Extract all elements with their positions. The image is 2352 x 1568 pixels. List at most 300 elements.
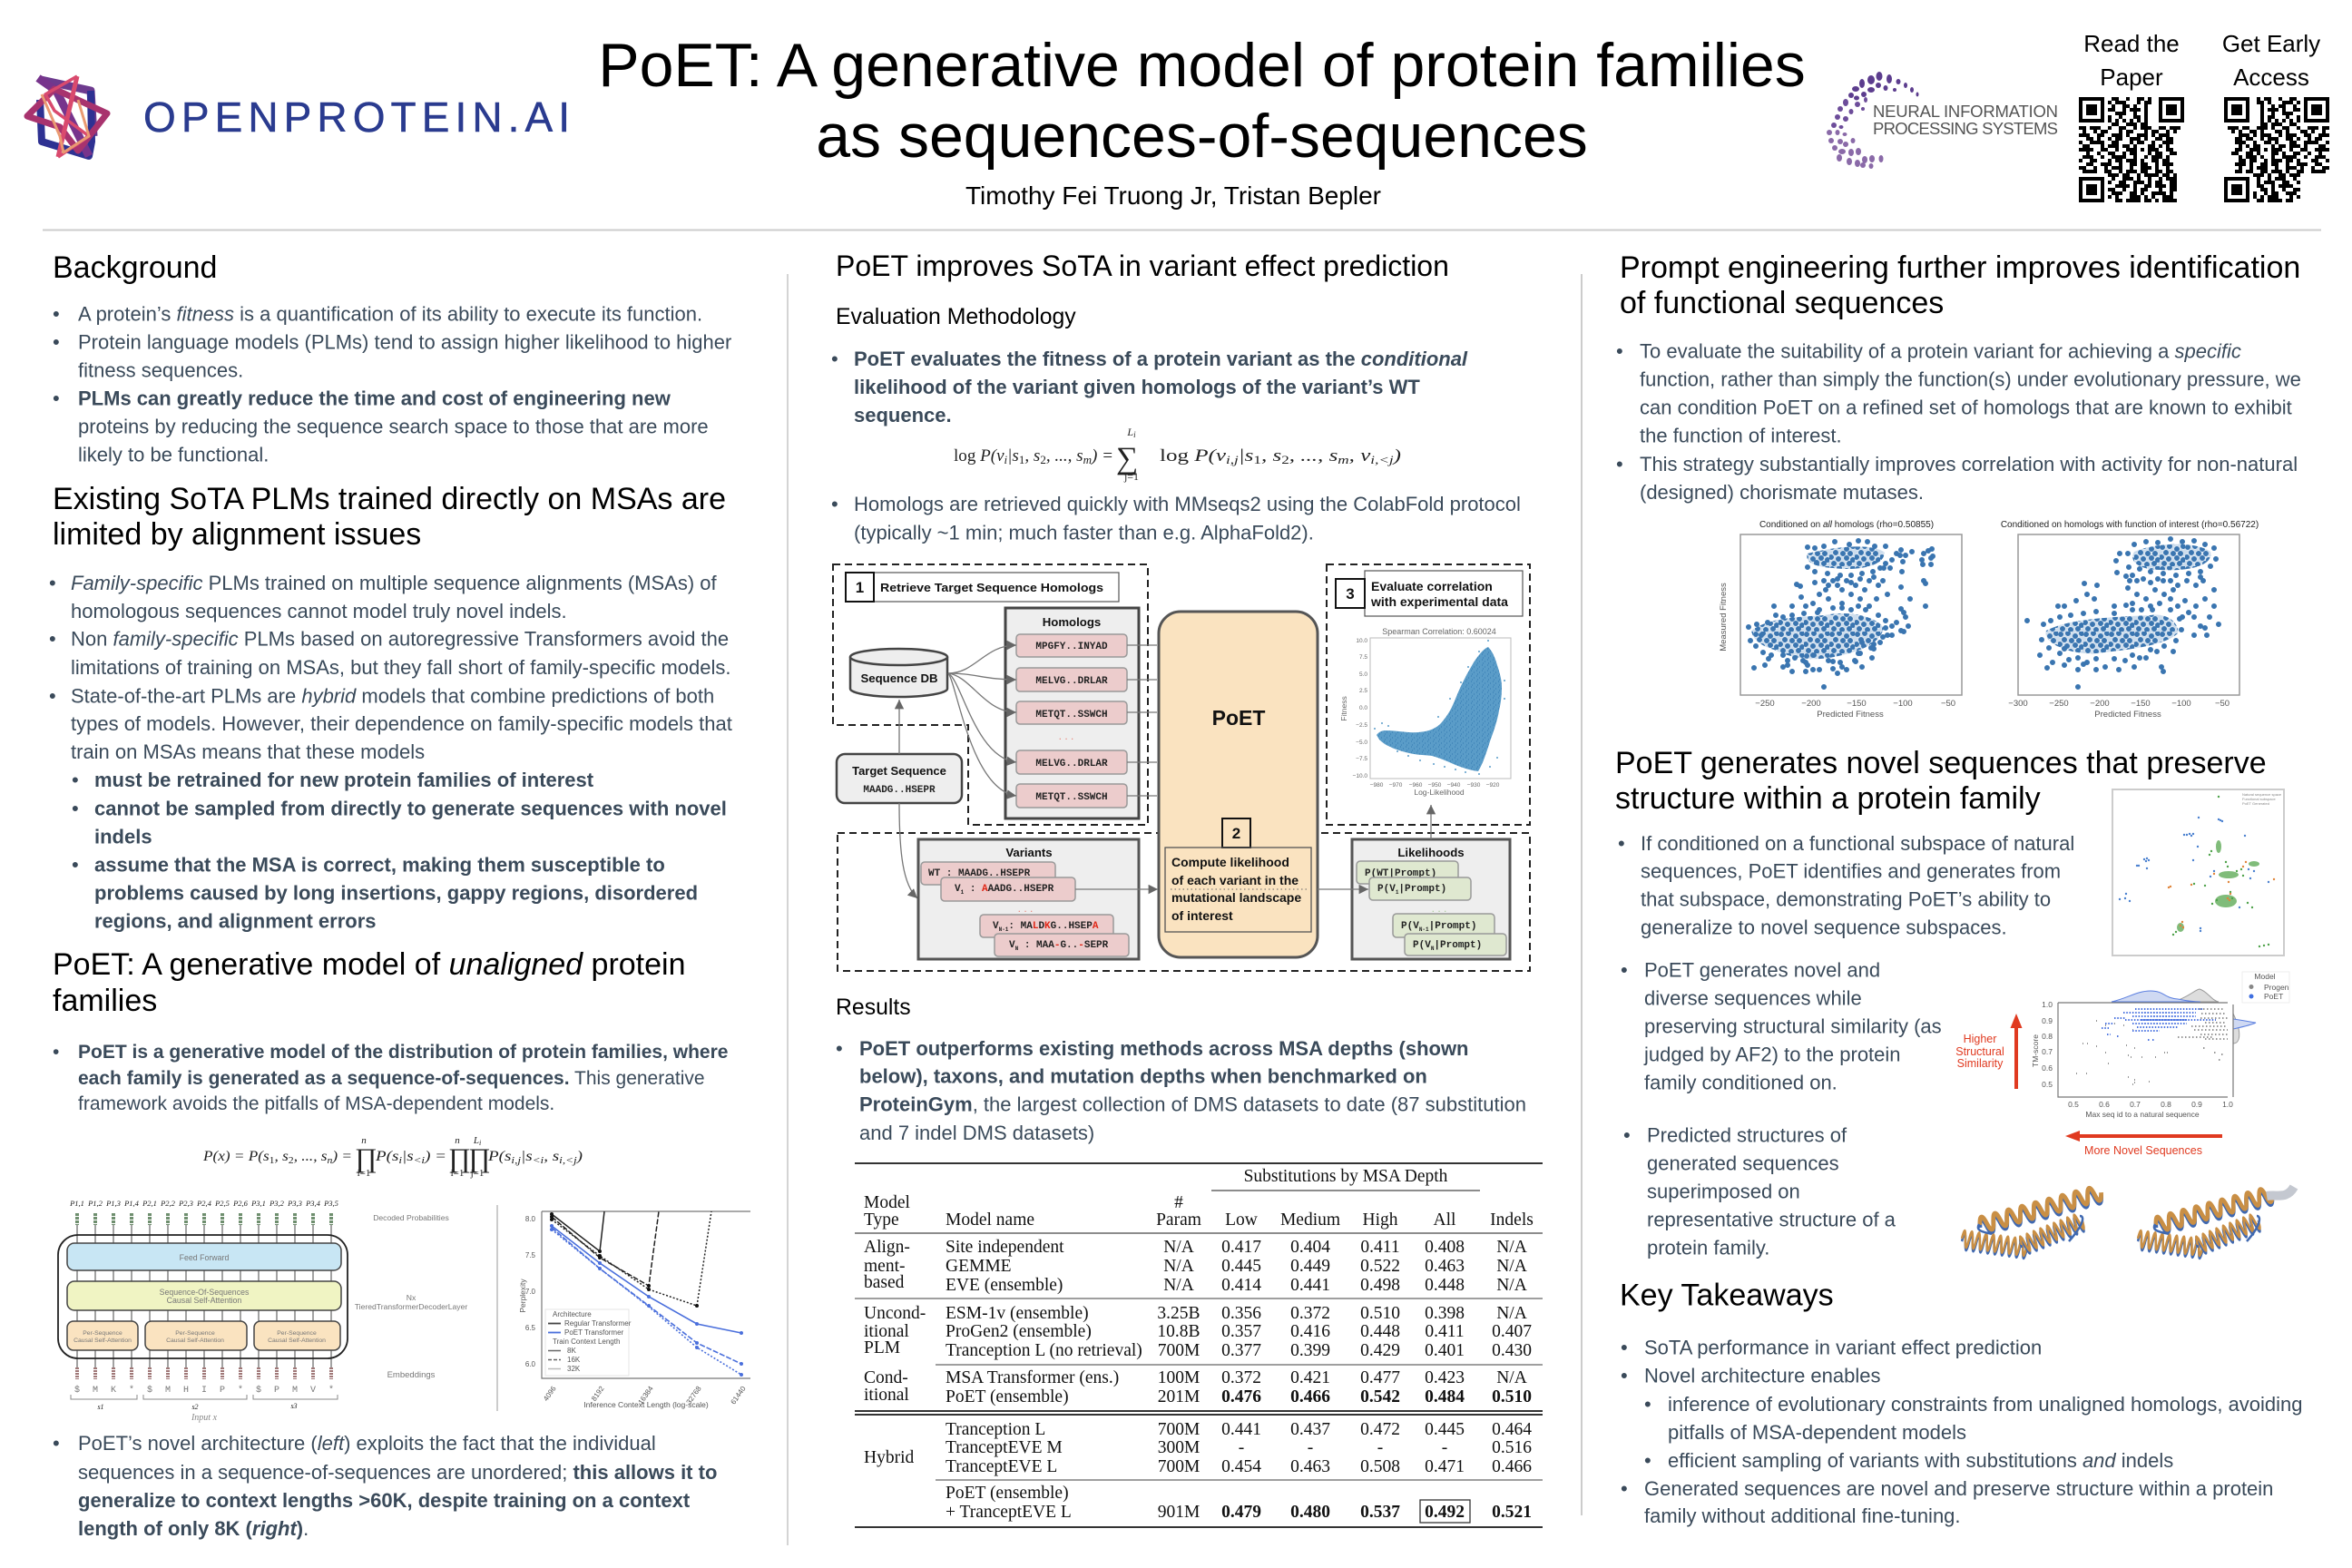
callout: higher structural similarity bbox=[1955, 1014, 2022, 1089]
score column: all: 0.445 bbox=[1425, 1420, 1465, 1439]
heading: background: Background bbox=[53, 250, 217, 285]
blue PoET points bbox=[2102, 1009, 2216, 1040]
text block: key takeaways: SoTA performance in variant effect prediction bbox=[1644, 1336, 2042, 1359]
panel: middle column bbox=[831, 250, 1543, 1527]
scattered points bbox=[2027, 539, 2219, 687]
tick labels: 0.7 bbox=[2042, 1047, 2053, 1056]
axis labels: Measured Fitness bbox=[1719, 583, 1729, 652]
input tokens: P bbox=[220, 1386, 225, 1396]
chart: all homologs scatter: Conditioned on all homologs (rho=0.50855) bbox=[1759, 520, 1934, 530]
table: benchmark results bbox=[855, 1163, 1543, 1527]
x tick labels: 16384 bbox=[637, 1385, 655, 1406]
text block: key takeaways: Generated sequences are novel and preserve structure within a protein bbox=[1644, 1477, 2273, 1500]
target sequence box bbox=[837, 754, 962, 803]
equation: sequence-of-sequences factorization: ∏ bbox=[468, 1143, 491, 1173]
step 1 header: Retrieve Target Sequence Homologs bbox=[880, 581, 1103, 594]
text block: background: proteins by reducing the sequence search space to those that are more bbox=[78, 416, 709, 437]
per-sequence attention blocks: Per-Sequence bbox=[175, 1330, 215, 1337]
homologs panel: Homologs bbox=[1043, 615, 1101, 629]
per-sequence attention blocks: Per-Sequence bbox=[83, 1330, 122, 1337]
probability labels: P3,1 bbox=[250, 1199, 266, 1208]
params column: N/A bbox=[1163, 1257, 1194, 1276]
PoET model box bbox=[1159, 612, 1318, 957]
callout: higher structural similarity: Structural bbox=[1955, 1045, 2004, 1058]
likelihoods panel bbox=[1352, 839, 1510, 959]
equation: sequence-of-sequences factorization: i bbox=[479, 1139, 481, 1147]
score column: all: 0.484 bbox=[1425, 1387, 1465, 1406]
likelihoods panel: P(V bbox=[1413, 940, 1431, 951]
logo wordmark: OPENPROTEIN.AI bbox=[143, 93, 570, 141]
text block: background: fitness sequences. bbox=[78, 359, 243, 381]
score column: medium: 0.441 bbox=[1290, 1276, 1330, 1295]
text block: prompt engineering: • bbox=[1616, 453, 1623, 475]
score column: low: 0.357 bbox=[1221, 1322, 1261, 1341]
heading: key takeaways: Key Takeaways bbox=[1620, 1278, 1834, 1312]
model names: Site independent bbox=[946, 1238, 1064, 1257]
score column: medium: 0.480 bbox=[1290, 1503, 1330, 1522]
y tick labels bbox=[525, 1215, 536, 1368]
legend bbox=[545, 1309, 632, 1376]
heading: prompt engineering: Prompt engineering further improves identification bbox=[1620, 250, 2300, 285]
legend: 16K bbox=[567, 1356, 581, 1364]
x tick labels: 4096 bbox=[542, 1385, 558, 1403]
text block: diversity: preserving structural similarity (as bbox=[1644, 1014, 1942, 1038]
text block: methodology: likelihood of the variant given homologs of the variant’s WT bbox=[854, 376, 1420, 398]
axis labels: −150 bbox=[2131, 699, 2151, 709]
text block: diversity: family conditioned on. bbox=[1644, 1071, 1838, 1094]
chart: homologs with function scatter bbox=[2001, 520, 2259, 720]
axis tick labels: −10.0 bbox=[1353, 773, 1367, 779]
probability labels: P2,2 bbox=[160, 1199, 176, 1208]
tick labels: 0.8 bbox=[2161, 1100, 2171, 1109]
text block: existing PLMs: limitations of training on MSAs, but they fall short of family-specific models. bbox=[71, 656, 731, 679]
model names bbox=[946, 1238, 1142, 1522]
text block: homolog retrieval: • bbox=[831, 493, 838, 515]
callout: more novel sequences: More Novel Sequences bbox=[2084, 1144, 2202, 1157]
outer decoder block bbox=[58, 1235, 348, 1358]
score column: low: 0.417 bbox=[1221, 1238, 1261, 1257]
y tick labels: 7.5 bbox=[525, 1251, 536, 1259]
heading: variant effect prediction: PoET improves SoTA in variant effect prediction bbox=[836, 250, 1449, 282]
input tokens: H bbox=[183, 1386, 189, 1396]
text block: diversity: • bbox=[1621, 958, 1628, 982]
chart markers bbox=[552, 1214, 697, 1306]
heading: prompt engineering bbox=[1620, 250, 2300, 320]
x tick labels: 8192 bbox=[590, 1385, 606, 1403]
sequence-of-sequences attention block bbox=[67, 1281, 341, 1310]
text block: existing PLMs: • bbox=[49, 628, 56, 650]
equation: conditional likelihood: m bbox=[1083, 453, 1092, 466]
heading: PoET generative model bbox=[53, 947, 686, 1018]
text block: existing PLMs: homologous sequences cannot model truly novel indels. bbox=[71, 600, 567, 622]
equation: sequence-of-sequences factorization: P(s bbox=[376, 1149, 395, 1164]
input tokens: * bbox=[328, 1385, 334, 1396]
variants panel: 1 bbox=[961, 889, 965, 896]
legend bbox=[2242, 972, 2289, 1003]
QR code bbox=[2075, 93, 2188, 206]
score column: low: 0.454 bbox=[1221, 1457, 1261, 1476]
score column: indels: N/A bbox=[1496, 1257, 1527, 1276]
equation: conditional likelihood: m bbox=[1338, 453, 1349, 466]
target sequence box: Target Sequence bbox=[852, 764, 946, 778]
variants panel: WT : MAADG..HSEPR bbox=[928, 868, 1031, 879]
text block: prompt engineering: (designed) chorismate mutases. bbox=[1640, 481, 1924, 504]
score column: low: 0.445 bbox=[1221, 1257, 1261, 1276]
axis labels: −100 bbox=[1893, 699, 1913, 709]
legend: Natural sequence space bbox=[2242, 792, 2282, 797]
x tick labels: 32768 bbox=[685, 1385, 703, 1406]
params column: 10.8B bbox=[1157, 1322, 1200, 1341]
tick labels: 1.0 bbox=[2042, 1000, 2053, 1009]
score column: all: 0.471 bbox=[1425, 1457, 1465, 1476]
chart: Spearman correlation scatter: Spearman Correlation: 0.60024 bbox=[1382, 627, 1496, 636]
homologs panel: . . . bbox=[1059, 730, 1073, 742]
equation: conditional likelihood: 1 bbox=[1253, 453, 1261, 466]
arrow: left bbox=[2065, 1131, 2222, 1142]
text block: novel architecture: generalize to context lengths >60K, despite training on a context bbox=[78, 1489, 691, 1512]
axis tick labels: −970 bbox=[1389, 782, 1403, 789]
model type labels: itional bbox=[864, 1322, 909, 1341]
model type labels bbox=[864, 1238, 926, 1467]
score column: indels: N/A bbox=[1496, 1368, 1527, 1387]
text block: existing PLMs bbox=[49, 572, 732, 933]
arrow: target to variants bbox=[899, 803, 917, 898]
model names: MSA Transformer (ens.) bbox=[946, 1368, 1119, 1387]
chart: sequence space projection bbox=[2112, 789, 2284, 956]
input tokens: $ bbox=[74, 1385, 80, 1396]
score column: medium: 0.437 bbox=[1290, 1420, 1330, 1439]
text block: key takeaways: efficient sampling of variants with substitutions and indels bbox=[1668, 1449, 2173, 1472]
score column: low: 0.476 bbox=[1221, 1387, 1261, 1406]
variants panel: : bbox=[964, 884, 982, 895]
text block: existing PLMs: • bbox=[49, 684, 56, 708]
chart: Spearman correlation scatter: Log-Likelihood bbox=[1414, 788, 1465, 797]
title: PoET: A generative model of protein families bbox=[598, 31, 1806, 100]
subheading: evaluation methodology: Evaluation Methodology bbox=[836, 305, 1076, 329]
text block: key takeaways: • bbox=[1644, 1449, 1651, 1472]
sequence labels: s3 bbox=[290, 1402, 298, 1410]
text block: existing PLMs: • bbox=[72, 769, 79, 791]
equation: sequence-of-sequences factorization: j=1 bbox=[470, 1168, 484, 1179]
tick labels: 0.9 bbox=[2042, 1016, 2053, 1025]
equation: conditional likelihood: i bbox=[1133, 430, 1136, 439]
axis tick labels: −7.5 bbox=[1356, 756, 1367, 762]
NeurIPS wordmark bbox=[1873, 102, 2058, 138]
arrow: target to database bbox=[898, 700, 900, 754]
generated points bbox=[2173, 797, 2269, 946]
score column: medium: 0.399 bbox=[1290, 1341, 1330, 1360]
step 1 header: 1 bbox=[856, 579, 864, 596]
step 3 header bbox=[1336, 571, 1523, 616]
text block: predicted structures: representative structure of a bbox=[1647, 1209, 1896, 1230]
axis tick labels: −960 bbox=[1409, 782, 1423, 789]
feed forward block bbox=[67, 1243, 341, 1270]
dashed region: step 3 bbox=[1327, 564, 1530, 825]
equation: conditional likelihood: , ..., s bbox=[1289, 446, 1338, 466]
axis tick labels: 7.5 bbox=[1359, 654, 1367, 661]
dashed region: step 2 bbox=[838, 833, 1530, 971]
params column: 3.25B bbox=[1157, 1304, 1200, 1323]
text block: results bbox=[836, 1037, 1526, 1144]
score column: high: 0.477 bbox=[1360, 1368, 1400, 1387]
text block: diversity: PoET generates novel and bbox=[1644, 958, 1880, 982]
score column: medium: 0.421 bbox=[1290, 1368, 1330, 1387]
score column: indels: 0.521 bbox=[1492, 1503, 1532, 1522]
legend: Architecture bbox=[553, 1310, 592, 1318]
x tick labels: 61440 bbox=[730, 1385, 748, 1406]
axis tick labels: −930 bbox=[1467, 782, 1481, 789]
equation: sequence-of-sequences factorization: i bbox=[398, 1155, 402, 1166]
per-sequence attention blocks: Causal Self-Attention bbox=[268, 1338, 326, 1344]
model type labels: itional bbox=[864, 1386, 909, 1405]
input tokens: * bbox=[238, 1385, 243, 1396]
text block: novel architecture: • bbox=[53, 1432, 60, 1455]
text block: predicted structures: • bbox=[1623, 1123, 1631, 1147]
text block: existing PLMs: regions, and alignment errors bbox=[94, 909, 377, 933]
table header: Indels bbox=[1490, 1210, 1534, 1230]
sequence-of-sequences attention block: Sequence-Of-Sequences bbox=[160, 1288, 250, 1297]
text block: background: A protein’s fitness is a quantification of its ability to execute its function. bbox=[78, 303, 702, 325]
score column: medium: 0.463 bbox=[1290, 1457, 1330, 1476]
variants panel: N bbox=[1015, 946, 1019, 952]
params column: 300M bbox=[1158, 1438, 1200, 1457]
step 3 header: Evaluate correlation bbox=[1371, 579, 1493, 593]
step 3 header: 3 bbox=[1346, 585, 1355, 603]
table header: Type bbox=[864, 1210, 899, 1230]
step 2 box bbox=[1165, 818, 1311, 932]
scatter cloud bbox=[1377, 647, 1502, 771]
legend: Progen bbox=[2264, 983, 2289, 992]
tick labels: 0.7 bbox=[2130, 1100, 2141, 1109]
text block: novel architecture bbox=[53, 1432, 717, 1540]
score column: high: 0.498 bbox=[1360, 1276, 1400, 1295]
diagram: evaluation workflow bbox=[833, 564, 1530, 971]
text block: key takeaways: inference of evolutionary constraints from unaligned homologs, avoiding bbox=[1668, 1393, 2303, 1416]
axis tick labels: −920 bbox=[1486, 782, 1500, 789]
step 2 box: of each variant in the bbox=[1171, 873, 1298, 887]
text block: existing PLMs: must be retrained for new protein families of interest bbox=[94, 769, 594, 791]
text block: methodology bbox=[831, 348, 1468, 426]
text block: key takeaways bbox=[1621, 1336, 2303, 1527]
text block: key takeaways: • bbox=[1621, 1477, 1628, 1500]
score column: low: 0.441 bbox=[1221, 1420, 1261, 1439]
PoET transformer lines bbox=[552, 1226, 741, 1375]
arrows: database to homologs bbox=[948, 645, 1016, 796]
text block: diversity bbox=[1621, 958, 1942, 1094]
probability labels: P1,1 bbox=[69, 1199, 84, 1208]
table header: Substitutions by MSA Depth bbox=[1244, 1167, 1448, 1186]
model names: ProGen2 (ensemble) bbox=[946, 1322, 1092, 1341]
heading: novel sequences: PoET generates novel sequences that preserve bbox=[1615, 746, 2267, 780]
tick labels: 0.6 bbox=[2099, 1100, 2110, 1109]
generated clusters bbox=[2177, 840, 2259, 932]
text block: existing PLMs: • bbox=[72, 797, 79, 820]
heading: existing PLMs bbox=[53, 482, 726, 552]
input tokens: $ bbox=[147, 1385, 152, 1396]
text block: prompt engineering bbox=[1616, 339, 2301, 504]
text block: PoET definition: framework avoids the pitfalls of MSA-dependent models. bbox=[78, 1093, 554, 1114]
decoded probability cells bbox=[77, 1213, 331, 1225]
text block: results: and 7 indel DMS datasets) bbox=[859, 1122, 1094, 1144]
step 1 header bbox=[846, 573, 1119, 602]
axis tick labels: 5.0 bbox=[1359, 671, 1367, 678]
layer labels bbox=[355, 1213, 467, 1380]
y tick labels: 6.0 bbox=[525, 1360, 536, 1368]
text block: background: • bbox=[53, 387, 60, 410]
x tick labels bbox=[542, 1385, 748, 1406]
score column: high: 0.508 bbox=[1360, 1457, 1400, 1476]
equation: sequence-of-sequences factorization: i=1 bbox=[451, 1168, 464, 1179]
likelihoods panel: P(V bbox=[1401, 921, 1419, 932]
label: Access bbox=[2233, 64, 2309, 91]
equation: conditional likelihood: log P(v bbox=[1160, 446, 1217, 466]
table header: High bbox=[1363, 1210, 1398, 1230]
text block: background bbox=[53, 303, 731, 466]
tick labels: 0.8 bbox=[2042, 1032, 2053, 1041]
table header: Param bbox=[1156, 1210, 1201, 1230]
icon: superimposed structure 2 bbox=[2137, 1187, 2294, 1258]
model type labels: based bbox=[864, 1273, 905, 1292]
homologs panel: MELVG..DRLAR bbox=[1035, 759, 1108, 769]
likelihoods panel: |Prompt) bbox=[1398, 884, 1446, 895]
text block: PoET definition: • bbox=[53, 1042, 59, 1063]
callout: higher structural similarity: Similarity bbox=[1957, 1057, 2004, 1070]
probability labels: P1,4 bbox=[123, 1199, 140, 1208]
equation: conditional likelihood: 2 bbox=[1040, 453, 1046, 466]
score column: high: 0.448 bbox=[1360, 1322, 1400, 1341]
model type labels: ment- bbox=[864, 1257, 905, 1276]
text block: results: PoET outperforms existing methods across MSA depths (shown bbox=[859, 1037, 1468, 1060]
sequence labels: s2 bbox=[191, 1403, 199, 1411]
probability labels: P3,2 bbox=[269, 1199, 285, 1208]
text block: methodology: PoET evaluates the fitness of a protein variant as the conditional bbox=[854, 348, 1468, 370]
equation: sequence-of-sequences factorization: ∏ bbox=[355, 1143, 377, 1173]
score column: indels: 0.464 bbox=[1492, 1420, 1532, 1439]
model names: EVE (ensemble) bbox=[946, 1276, 1063, 1295]
score column: all: 0.448 bbox=[1425, 1276, 1465, 1295]
regular transformer lines bbox=[552, 1211, 711, 1306]
text block: homolog retrieval: (typically ~1 min; much faster than e.g. AlphaFold2). bbox=[854, 521, 1314, 544]
score column: indels: 0.430 bbox=[1492, 1341, 1532, 1360]
arrow: likelihoods to correlation bbox=[1430, 805, 1432, 839]
score column: high: 0.411 bbox=[1360, 1238, 1400, 1257]
equation: conditional likelihood bbox=[954, 426, 1401, 483]
params column: N/A bbox=[1163, 1238, 1194, 1257]
params column: 100M bbox=[1158, 1368, 1200, 1387]
callout: more novel sequences bbox=[2065, 1131, 2222, 1157]
text block: predicted structures: protein family. bbox=[1647, 1236, 1769, 1259]
model names: PoET (ensemble) bbox=[946, 1484, 1069, 1503]
score column: high: 0.429 bbox=[1360, 1341, 1400, 1360]
probability labels: P1,2 bbox=[87, 1199, 103, 1208]
table header: Model name bbox=[946, 1210, 1034, 1230]
score column: all: - bbox=[1442, 1438, 1447, 1457]
variants panel bbox=[918, 839, 1139, 959]
equation: conditional likelihood: log P(v bbox=[954, 446, 1004, 466]
text block: predicted structures bbox=[1623, 1123, 1896, 1259]
score column: medium: 0.372 bbox=[1290, 1304, 1330, 1323]
model names: + TranceptEVE L bbox=[946, 1503, 1072, 1522]
variants panel: -G..-SEPR bbox=[1054, 940, 1108, 951]
text block: PoET definition: PoET is a generative model of the distribution of protein families, where bbox=[78, 1042, 728, 1063]
params column: 700M bbox=[1158, 1457, 1200, 1476]
text block: existing PLMs: assume that the MSA is correct, making them susceptible to bbox=[94, 853, 665, 877]
equation: sequence-of-sequences factorization: P(x) = P(s bbox=[203, 1149, 265, 1164]
equation: conditional likelihood: |s bbox=[1239, 446, 1253, 466]
axis tick labels bbox=[1353, 638, 1500, 789]
tick labels: 0.5 bbox=[2068, 1100, 2079, 1109]
logo: NeurIPS bbox=[1827, 72, 2058, 169]
chart: Spearman correlation scatter bbox=[1339, 627, 1511, 797]
step 2 box: of interest bbox=[1171, 908, 1233, 923]
text block: predicted structures: Predicted structures of bbox=[1647, 1123, 1847, 1147]
equation: sequence-of-sequences factorization: n bbox=[361, 1135, 367, 1146]
params column: 700M bbox=[1158, 1341, 1200, 1360]
axis labels: Predicted Fitness bbox=[1817, 710, 1884, 720]
score column: indels bbox=[1492, 1238, 1532, 1522]
likelihoods panel: P(WT|Prompt) bbox=[1365, 868, 1436, 879]
chart: homologs with function scatter: Conditioned on homologs with function of interest (rho=0.56722) bbox=[2001, 520, 2259, 530]
score column: medium: 0.416 bbox=[1290, 1322, 1330, 1341]
text block: existing PLMs: types of models. However, their dependence on family-specific models that bbox=[71, 712, 732, 735]
equation: sequence-of-sequences factorization: 2 bbox=[289, 1155, 294, 1166]
legend: Regular Transformer bbox=[564, 1319, 632, 1328]
axis tick labels: −940 bbox=[1447, 782, 1461, 789]
variants panel: LDKG..HSEPA bbox=[1033, 921, 1098, 932]
legend: 8K bbox=[567, 1347, 576, 1355]
text block: subspace: If conditioned on a functional subspace of natural bbox=[1641, 832, 2074, 855]
equation: sequence-of-sequences factorization: 1 bbox=[270, 1155, 275, 1166]
axis tick labels: 0.0 bbox=[1359, 705, 1367, 711]
probability labels: P2,4 bbox=[196, 1199, 212, 1208]
equation: conditional likelihood: i,<j bbox=[1370, 453, 1394, 466]
score column: medium: - bbox=[1308, 1438, 1313, 1457]
sequence labels bbox=[97, 1402, 298, 1423]
equation: sequence-of-sequences factorization: <i bbox=[533, 1155, 544, 1166]
label: Get Early bbox=[2222, 30, 2320, 57]
dense clusters bbox=[2045, 615, 2178, 653]
icon: logo mark bbox=[27, 76, 107, 157]
text block: novel architecture: sequences in a sequence-of-sequences are unordered; this allows it to bbox=[78, 1461, 717, 1484]
equation: conditional likelihood: i bbox=[1004, 453, 1008, 466]
likelihoods panel: N-1 bbox=[1419, 926, 1429, 933]
text block: existing PLMs: problems caused by long insertions, gappy regions, disordered bbox=[94, 882, 698, 904]
text block: existing PLMs: indels bbox=[94, 826, 152, 848]
text block: homolog retrieval bbox=[831, 493, 1521, 544]
chart: perplexity vs context length bbox=[518, 1211, 750, 1409]
score column: low: 0.356 bbox=[1221, 1304, 1261, 1323]
equation: sequence-of-sequences factorization: ∏ bbox=[448, 1143, 471, 1173]
score column: indels: 0.510 bbox=[1492, 1387, 1532, 1406]
variants panel: : MAA bbox=[1018, 940, 1054, 951]
equation: sequence-of-sequences factorization: ) bbox=[575, 1149, 583, 1164]
equation: conditional likelihood: 2 bbox=[1281, 453, 1289, 466]
text block: background: PLMs can greatly reduce the time and cost of engineering new bbox=[78, 387, 671, 410]
params column bbox=[1157, 1238, 1200, 1522]
tick labels bbox=[2042, 1000, 2233, 1109]
chart: TM-score joint plot: TM-score bbox=[2031, 1034, 2040, 1067]
axis labels: −250 bbox=[2049, 699, 2069, 709]
probability labels: P3,3 bbox=[287, 1199, 302, 1208]
model names: TranceptEVE M bbox=[946, 1438, 1063, 1457]
text block: existing PLMs: • bbox=[49, 572, 56, 594]
per-sequence attention blocks: Per-Sequence bbox=[277, 1330, 317, 1337]
input tokens: M bbox=[292, 1386, 298, 1396]
model type labels: Align- bbox=[864, 1238, 910, 1257]
equation: conditional likelihood: |s bbox=[1007, 446, 1019, 466]
equation: sequence-of-sequences factorization: ) = bbox=[424, 1149, 446, 1164]
step 2 box: Compute likelihood bbox=[1171, 855, 1289, 869]
